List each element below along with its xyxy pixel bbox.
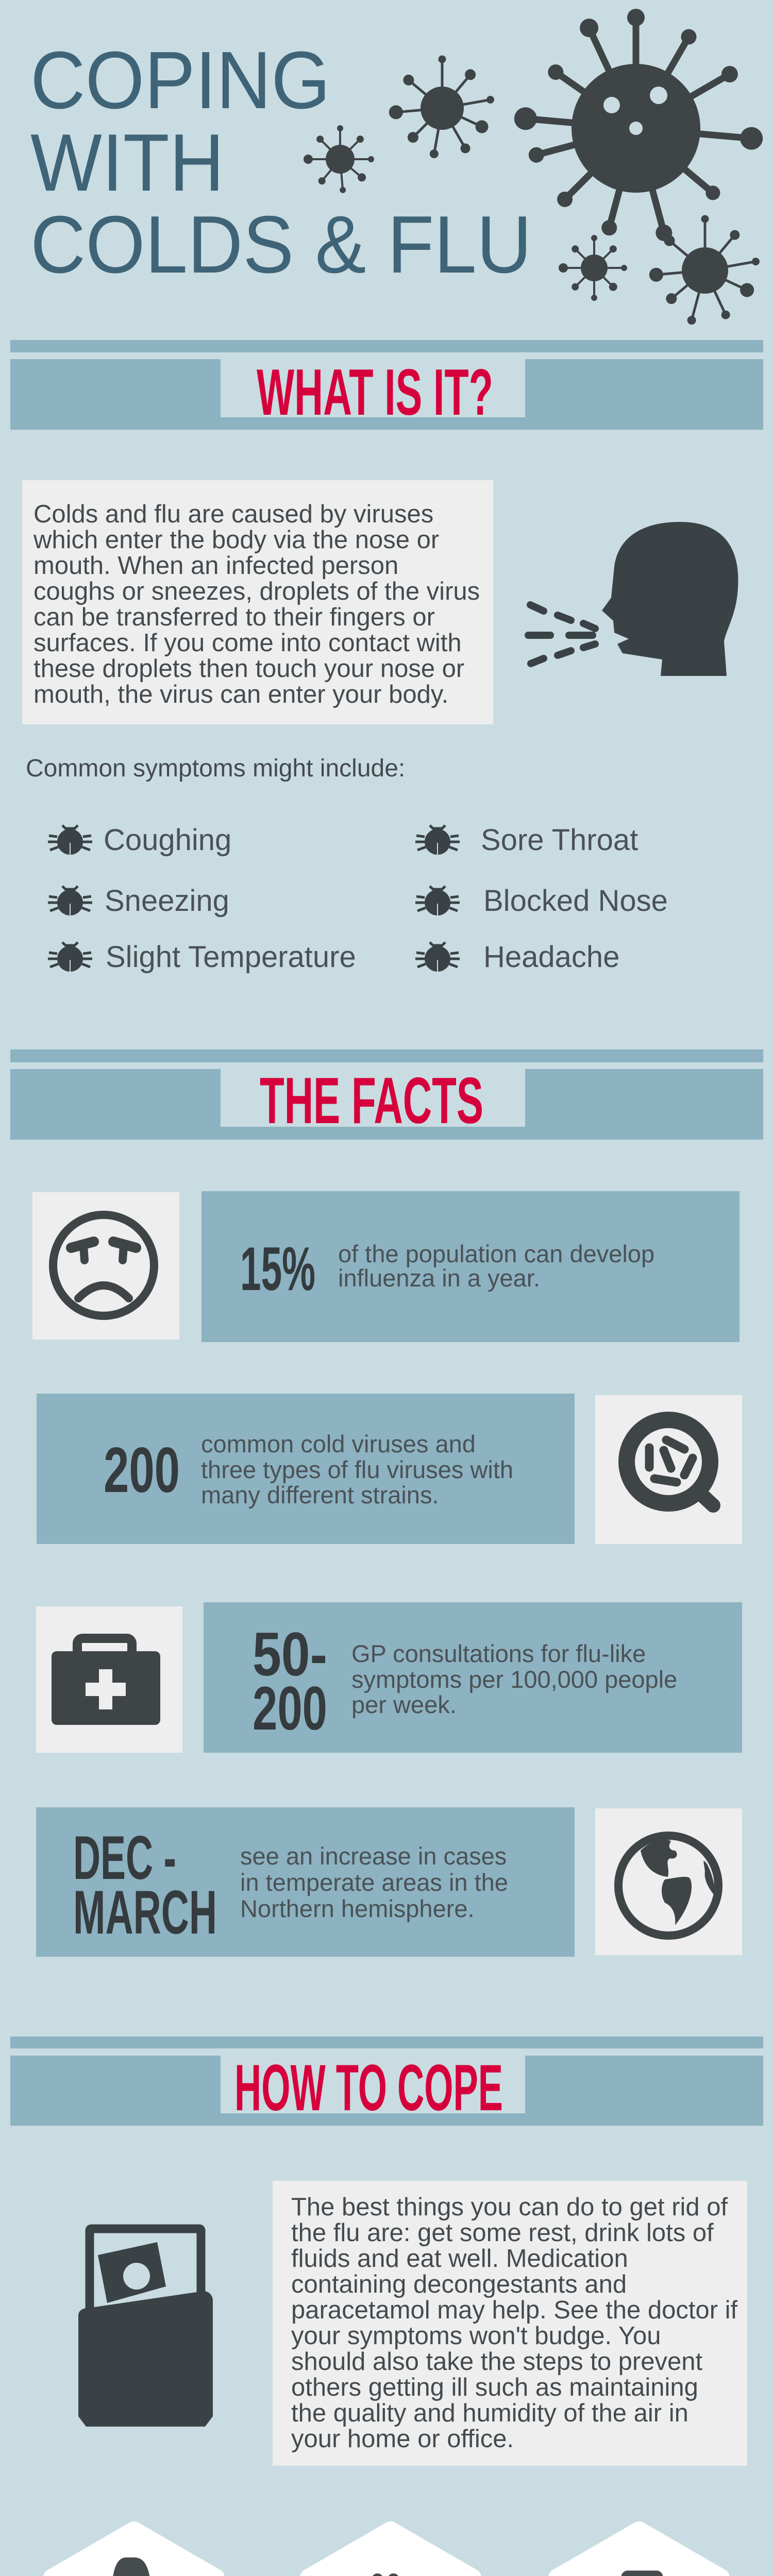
title: WITH — [30, 117, 224, 208]
title: COPING — [30, 35, 330, 126]
text block: how to cope advice: should also take the steps to prevent — [291, 2348, 703, 2376]
fact 4: dec-march: in temperate areas in the — [240, 1869, 508, 1896]
text block: virus explanation: Colds and flu are caused by viruses — [33, 500, 433, 528]
fact 4: dec-march — [36, 1807, 742, 1957]
icon: small virus bottom — [560, 236, 626, 300]
icon: big virus — [513, 9, 764, 243]
icon: medium virus bottom right — [650, 216, 759, 324]
heading: how to cope — [10, 2037, 763, 2126]
text: common symptoms: Common symptoms might include: — [26, 755, 405, 782]
text block: virus explanation — [22, 480, 493, 724]
icon: medium virus — [390, 57, 493, 158]
title — [30, 35, 532, 290]
icon: small virus — [305, 126, 373, 192]
fact 4: dec-march: see an increase in cases — [240, 1842, 507, 1870]
text block: virus explanation: mouth, the virus can enter your body. — [33, 681, 448, 708]
list: symptoms: Coughing — [104, 823, 231, 857]
text block: how to cope advice: containing decongestants and — [291, 2270, 627, 2298]
icon: sneezing head — [528, 522, 738, 676]
text block: virus explanation: coughs or sneezes, droplets of the virus — [33, 578, 480, 605]
list: symptoms: Sneezing — [105, 884, 229, 918]
heading: what is it: WHAT IS IT? — [257, 355, 493, 429]
text block: how to cope advice: the flu are: get some rest, drink lots of — [291, 2219, 714, 2247]
text block: how to cope advice: the quality and humidity of the air in — [291, 2399, 688, 2427]
list: symptoms: Blocked Nose — [483, 884, 668, 918]
fact 3: 50-200 — [36, 1602, 742, 1753]
heading: the facts — [10, 1049, 763, 1140]
fact 4: dec-march: MARCH — [73, 1878, 217, 1947]
fact 3: 50-200: 50- — [253, 1620, 327, 1689]
fact 4: dec-march: DEC - — [73, 1823, 176, 1892]
text block: how to cope advice: paracetamol may help. See the doctor if — [291, 2296, 738, 2324]
fact 1: 15%: 15% — [240, 1234, 315, 1303]
fact 2: 200: many different strains. — [201, 1481, 439, 1509]
fact 1: 15% — [32, 1191, 740, 1342]
title: COLDS & FLU — [30, 199, 532, 290]
hexagon: catch it — [52, 2530, 216, 2576]
text block: virus explanation: surfaces. If you come into contact with — [33, 629, 462, 657]
fact 1: 15%: of the population can develop — [338, 1240, 654, 1267]
fact 2: 200: three types of flu viruses with — [201, 1456, 513, 1483]
fact 2: 200 — [37, 1394, 742, 1544]
text block: virus explanation: can be transferred to their fingers or — [33, 603, 435, 631]
list: symptoms — [48, 823, 668, 974]
fact 4: dec-march: Northern hemisphere. — [240, 1895, 475, 1922]
heading: what is it — [10, 340, 763, 430]
fact 3: 50-200: GP consultations for flu-like — [351, 1640, 646, 1667]
text block: how to cope advice — [273, 2181, 747, 2466]
text block: how to cope advice: The best things you can do to get rid of — [291, 2193, 728, 2221]
fact 2: 200: common cold viruses and — [201, 1430, 476, 1458]
heading: the facts: THE FACTS — [260, 1064, 483, 1137]
text block: how to cope advice: your home or office. — [291, 2425, 514, 2453]
fact 3: 50-200: per week. — [351, 1691, 457, 1718]
fact 2: 200: 200 — [104, 1435, 180, 1506]
text block: virus explanation: which enter the body via the nose or — [33, 526, 439, 554]
list: symptoms: Headache — [483, 940, 619, 974]
icon: bed — [78, 2229, 213, 2427]
fact 1: 15%: influenza in a year. — [338, 1264, 540, 1292]
text block: how to cope advice: your symptoms won't budge. You — [291, 2322, 661, 2350]
text block: virus explanation: these droplets then touch your nose or — [33, 655, 464, 683]
text block: how to cope advice: fluids and eat well. Medication — [291, 2245, 628, 2273]
fact 3: 50-200: symptoms per 100,000 people — [351, 1666, 677, 1693]
text block: virus explanation: mouth. When an infected person — [33, 552, 398, 580]
list: symptoms: Slight Temperature — [106, 940, 356, 974]
hexagon: kill it — [309, 2530, 473, 2576]
fact 3: 50-200: 200 — [253, 1674, 327, 1743]
list: symptoms: Sore Throat — [481, 823, 638, 857]
heading: how to cope: HOW TO COPE — [234, 2051, 503, 2124]
text block: how to cope advice: others getting ill such as maintaining — [291, 2374, 698, 2401]
hexagon: bin it — [557, 2530, 721, 2576]
